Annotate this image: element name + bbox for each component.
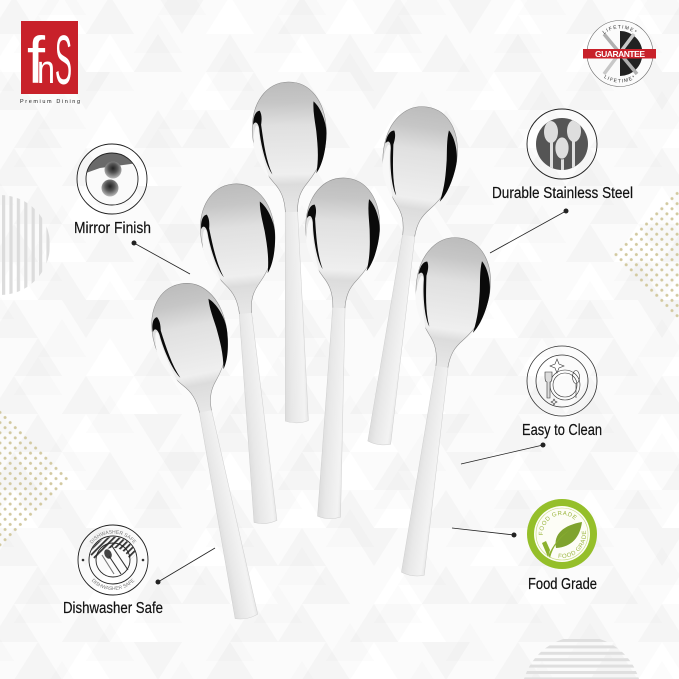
badge: lifetime guarantee — [583, 20, 656, 87]
pointer: mirror finish — [132, 240, 190, 274]
logo: FnS Premium Dining — [20, 21, 80, 105]
icon: dishwasher safe: DISHWASHER SAFE — [90, 530, 136, 544]
feature: dishwasher safe — [63, 524, 163, 617]
spoon 3: centre right — [292, 176, 382, 520]
icon: food grade: FOOD GRADE — [558, 530, 586, 558]
logo: FnS Premium Dining: Premium Dining — [20, 99, 80, 105]
logo: FnS Premium Dining: n — [37, 48, 55, 92]
label: dishwasher safe: Dishwasher Safe — [63, 600, 163, 617]
icon: food grade: FOOD GRADE — [538, 511, 578, 535]
label: durable stainless steel: Durable Stainless Steel — [492, 185, 633, 202]
spoon 5: far left — [144, 277, 283, 626]
decoration: right dotted diamond — [612, 188, 679, 322]
pointer: food grade — [452, 528, 516, 538]
spoon 1: top centre — [251, 81, 334, 424]
icon: easy to clean — [527, 346, 597, 416]
feature: food grade — [527, 499, 597, 593]
decoration: left striped circle — [0, 195, 50, 295]
feature: durable stainless steel — [492, 109, 633, 202]
pointer: durable stainless steel — [490, 208, 568, 253]
spoon 2: second left — [196, 180, 303, 527]
icon: mirror finish — [77, 144, 147, 214]
badge: lifetime guarantee: LIFETIME* — [604, 74, 634, 82]
pointer: dishwasher safe — [156, 548, 215, 584]
pointer: easy to clean — [461, 442, 546, 464]
decoration: left dotted diamond — [0, 405, 72, 549]
label: easy to clean: Easy to Clean — [522, 422, 602, 439]
badge: lifetime guarantee: GUARANTEE — [595, 49, 645, 59]
spoon 4: upper right — [342, 102, 464, 450]
logo: FnS Premium Dining: S — [55, 21, 72, 99]
decoration: bottom striped circle — [524, 636, 639, 679]
icon: dishwasher safe — [78, 524, 148, 596]
icon: food grade — [527, 499, 597, 569]
label: mirror finish: Mirror Finish — [74, 220, 151, 237]
icon: durable stainless steel — [527, 109, 597, 180]
label: food grade: Food Grade — [528, 576, 597, 593]
badge: lifetime guarantee: LIFETIME* — [602, 25, 637, 34]
logo: FnS Premium Dining: f — [27, 23, 46, 97]
feature: mirror finish — [74, 144, 151, 237]
icon: dishwasher safe: DISHWASHER SAFE — [92, 578, 134, 590]
spoon 6: far right — [376, 233, 497, 581]
feature: easy to clean — [522, 346, 602, 439]
